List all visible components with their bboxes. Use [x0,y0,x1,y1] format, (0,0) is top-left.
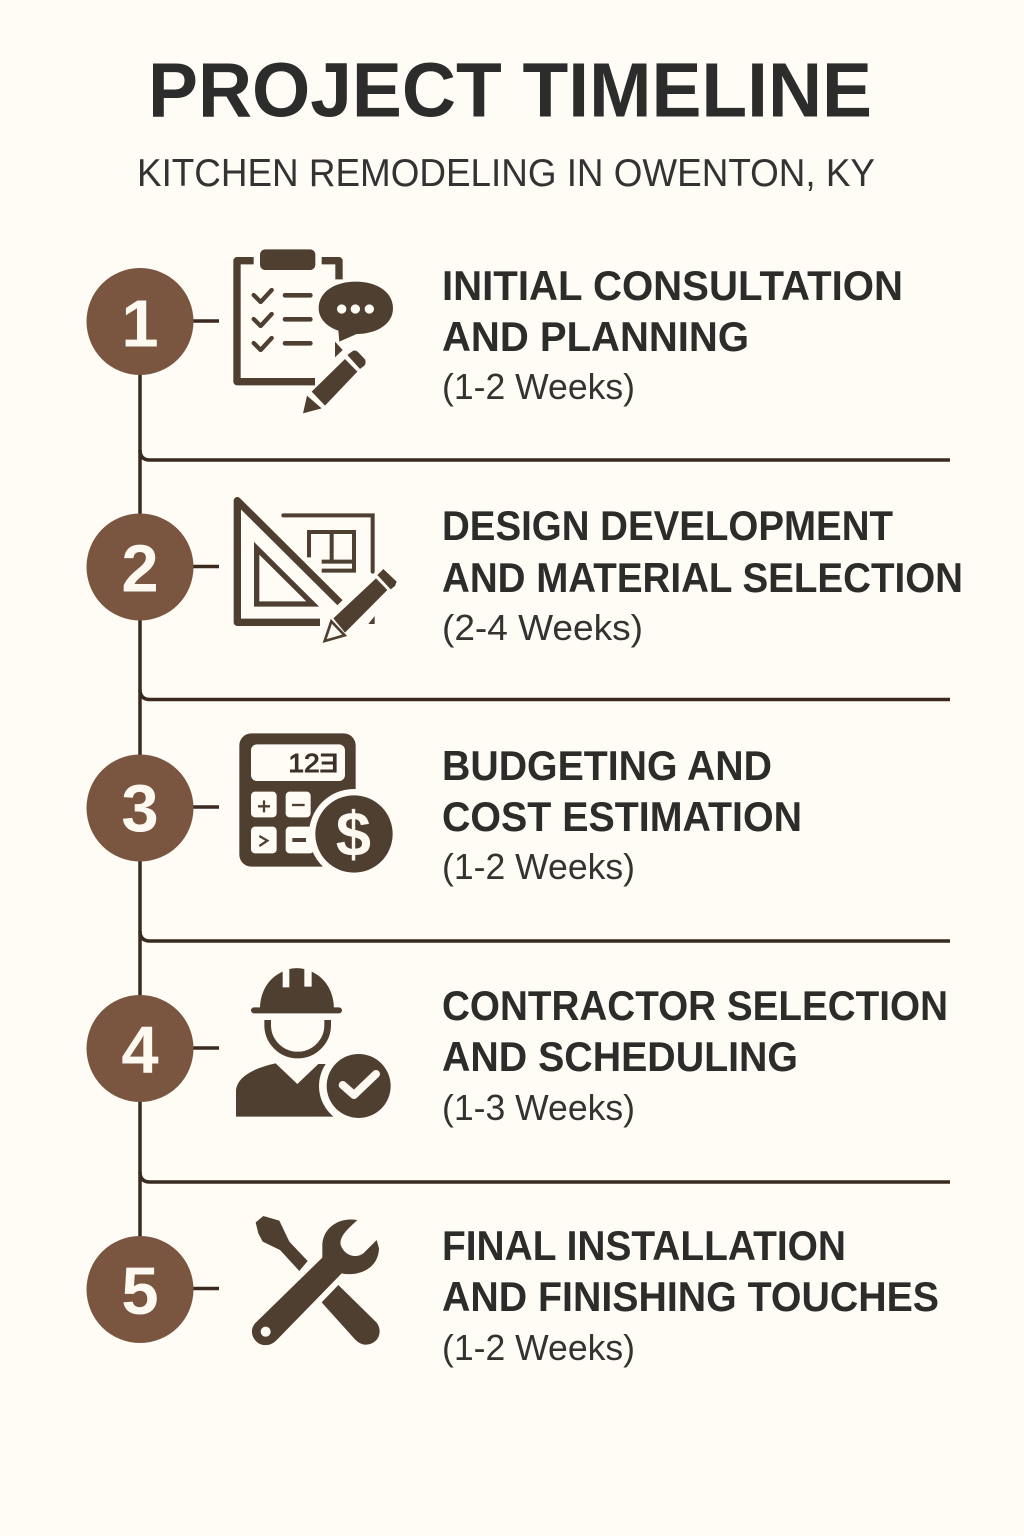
icon: set square, floor plan and pencil [237,501,397,641]
step 5 number badge [86,1236,194,1343]
step 3 number badge: 3 [121,772,159,846]
step 5 [86,1216,939,1368]
step 4 text: (1-3 Weeks) [442,1087,635,1128]
step 3 text: (1-2 Weeks) [442,846,635,887]
icon: calculator with dollar coin: 12Ǝ [288,748,338,778]
step 3 text [442,742,802,887]
step 5 text: AND FINISHING TOUCHES [442,1273,939,1320]
step 1 number badge [86,268,194,375]
step 1 text: (1-2 Weeks) [442,366,635,407]
timeline connector lines [140,321,950,1288]
step 4 number badge: 4 [121,1013,159,1088]
step 2 text [442,502,963,648]
icon: contractor with hard hat and check badge [236,968,398,1126]
icon: crossed wrench and screwdriver [252,1216,380,1345]
step 3 [86,733,802,887]
icon: calculator with dollar coin [239,733,399,879]
step 1 text [442,262,903,407]
step 1 text: AND PLANNING [442,313,749,360]
step 1 text: INITIAL CONSULTATION [442,262,903,309]
step 3 text: COST ESTIMATION [442,793,802,840]
step 4 number badge [86,995,194,1102]
step 1 [86,249,903,413]
step 2 number badge: 2 [121,532,159,606]
step 3 text: BUDGETING AND [442,742,772,789]
icon: calculator with dollar coin: $ [336,800,371,870]
step 4 [86,968,948,1128]
step 2 text: (2-4 Weeks) [442,607,643,648]
step 5 number badge: 5 [121,1254,159,1329]
step 4 text: AND SCHEDULING [442,1033,798,1080]
title: PROJECT TIMELINE [148,48,872,134]
step 2 text: AND MATERIAL SELECTION [442,554,963,601]
subtitle: KITCHEN REMODELING IN OWENTON, KY [137,152,875,195]
step 5 text: (1-2 Weeks) [442,1327,635,1368]
icon: clipboard with speech bubble and pencil [237,249,393,413]
step 4 text [442,982,948,1128]
step 3 number badge [86,754,194,862]
step 4 text: CONTRACTOR SELECTION [442,982,948,1029]
step 2 number badge [86,514,194,620]
step 1 number badge: 1 [121,286,159,362]
step 2 text: DESIGN DEVELOPMENT [442,502,893,549]
step 2 [86,501,963,648]
step 5 text: FINAL INSTALLATION [442,1222,846,1269]
step 5 text [442,1222,939,1368]
